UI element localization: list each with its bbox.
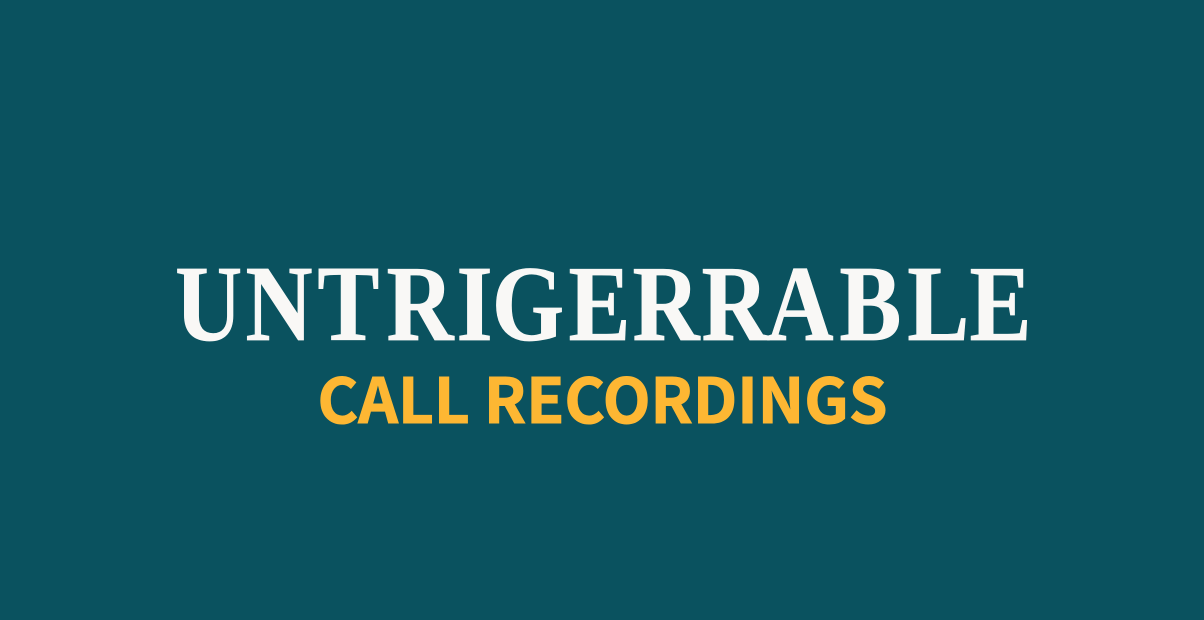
title: UNTRIGERRABLE <box>175 243 1031 364</box>
subtitle: CALL RECORDINGS <box>318 351 888 441</box>
